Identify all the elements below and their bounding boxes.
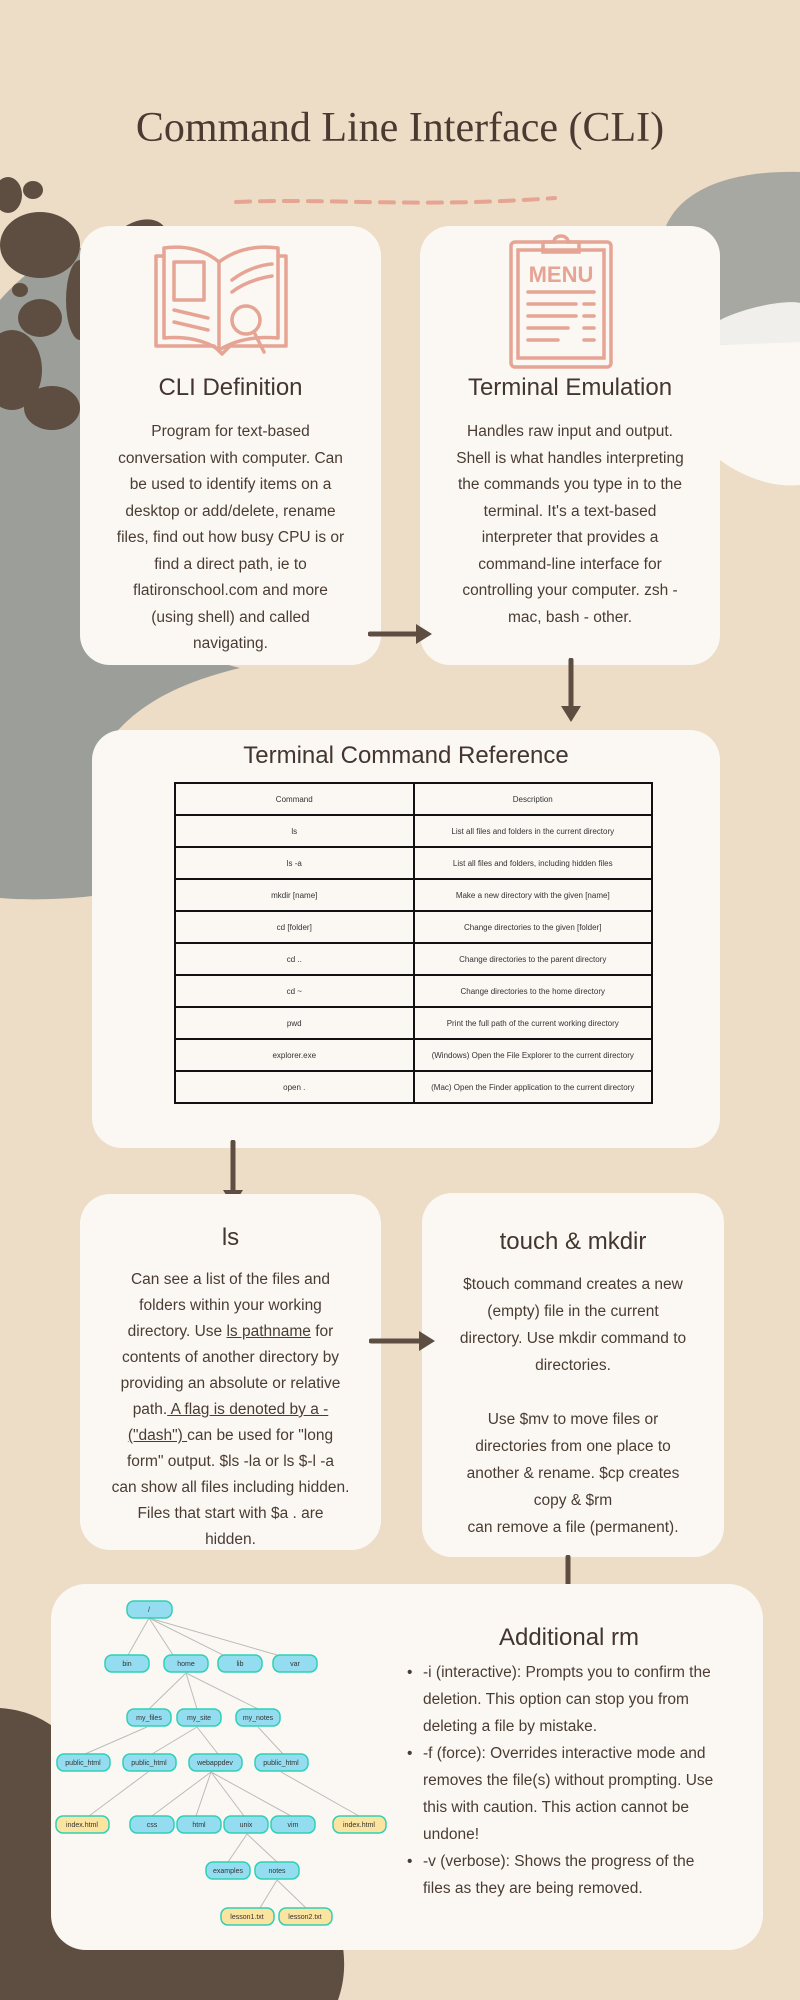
text block: navigating. xyxy=(193,635,268,652)
text block: (using shell) and called xyxy=(151,608,310,626)
chart: directory tree: var xyxy=(290,1661,301,1668)
bullet list: removes the file(s) without prompting. Use xyxy=(423,1772,713,1789)
text block: Handles raw input and output. xyxy=(467,423,673,440)
bullet list: -i (interactive): Prompts you to confirm the xyxy=(423,1664,711,1681)
text block: interpreter that provides a xyxy=(482,529,658,546)
table: ls -a xyxy=(287,858,302,868)
text block: folders within your working xyxy=(139,1297,322,1314)
text block: controlling your computer. zsh - xyxy=(462,582,678,599)
title: Command Line Interface (CLI) xyxy=(136,105,664,151)
table: Print the full path of the current working directory xyxy=(447,1018,619,1028)
arrow: down 3 xyxy=(566,1555,570,1584)
text block: the commands you type in to the xyxy=(458,476,682,493)
chart: directory tree: home xyxy=(177,1661,195,1668)
text block: desktop or add/delete, rename xyxy=(125,502,336,520)
text block xyxy=(112,1271,349,1548)
chart: directory tree: unix xyxy=(240,1822,253,1829)
text block: command-line interface for xyxy=(478,556,662,572)
chart: directory tree: index.html xyxy=(343,1822,375,1829)
heading: touch & mkdir xyxy=(500,1228,646,1255)
table: open . xyxy=(283,1082,305,1092)
chart: directory tree xyxy=(55,1600,387,1926)
bullet list: -f (force): Overrides interactive mode and xyxy=(423,1745,706,1762)
text block: $touch command creates a new xyxy=(463,1276,683,1293)
text block: find a direct path, ie to xyxy=(154,556,307,572)
bullet list: • xyxy=(407,1745,412,1762)
text block xyxy=(116,423,344,652)
heading: Terminal Emulation xyxy=(468,374,672,401)
table: Description xyxy=(513,794,553,804)
text block: providing an absolute or relative xyxy=(121,1375,340,1392)
text block: directories. xyxy=(535,1357,611,1374)
chart: directory tree: css xyxy=(147,1822,158,1829)
bullet list: undone! xyxy=(423,1826,479,1843)
heading: ls xyxy=(222,1224,239,1251)
chart: directory tree: my_notes xyxy=(243,1715,274,1722)
text block: copy & $rm xyxy=(534,1492,612,1509)
table: mkdir [name] xyxy=(271,890,317,900)
chart: directory tree: vim xyxy=(288,1822,299,1829)
icon: menu clipboard: MENU xyxy=(529,262,593,287)
chart: directory tree: html xyxy=(192,1822,206,1829)
chart: directory tree: / xyxy=(148,1607,150,1614)
icon: open book with magnifier xyxy=(154,245,288,356)
panel: additional rm xyxy=(51,1584,763,1950)
text block: Program for text-based xyxy=(151,423,310,440)
text block: Use $mv to move files or xyxy=(488,1411,658,1428)
text block: files, find out how busy CPU is or xyxy=(117,529,344,546)
bullet list xyxy=(407,1664,713,1897)
table: (Windows) Open the File Explorer to the current directory xyxy=(432,1050,634,1060)
text block: can show all files including hidden. xyxy=(112,1479,349,1496)
table: cd ~ xyxy=(287,986,302,996)
table xyxy=(174,782,653,1104)
chart: directory tree: bin xyxy=(122,1661,132,1668)
text block: Files that start with $a . are xyxy=(137,1505,324,1522)
bullet list: • xyxy=(407,1664,412,1681)
chart: directory tree: my_files xyxy=(136,1715,162,1722)
panel: CLI definition xyxy=(80,226,381,665)
panel: terminal emulation xyxy=(420,226,720,665)
text block: Can see a list of the files and xyxy=(131,1271,330,1288)
table: pwd xyxy=(287,1018,302,1028)
arrow: right 2 xyxy=(369,1331,435,1351)
table: (Mac) Open the Finder application to the current directory xyxy=(431,1082,634,1092)
table: Make a new directory with the given [name] xyxy=(456,890,610,900)
chart: directory tree: lesson2.txt xyxy=(288,1914,322,1921)
panel: ls xyxy=(80,1194,381,1550)
bullet list: • xyxy=(407,1853,412,1870)
table: Command xyxy=(276,794,313,804)
text block: Shell is what handles interpreting xyxy=(456,450,684,466)
table: List all files and folders in the current directory xyxy=(451,826,614,836)
text block: (empty) file in the current xyxy=(487,1303,659,1320)
text block xyxy=(460,1276,686,1536)
text block: directory. Use mkdir command to xyxy=(460,1330,686,1347)
text block xyxy=(456,423,684,626)
chart: directory tree: webappdev xyxy=(196,1760,233,1767)
bullet list: files as they are being removed. xyxy=(423,1880,643,1897)
arrow: down 1 xyxy=(561,658,581,722)
table: ls xyxy=(291,826,297,836)
panel: touch & mkdir xyxy=(422,1193,724,1557)
table: explorer.exe xyxy=(272,1050,316,1060)
heading: Additional rm xyxy=(499,1624,639,1651)
icon: menu clipboard xyxy=(509,234,613,369)
table: Change directories to the parent directory xyxy=(459,954,606,964)
bullet list: this with caution. This action cannot be xyxy=(423,1799,689,1816)
table: Change directories to the home directory xyxy=(460,986,605,996)
chart: directory tree: lesson1.txt xyxy=(230,1914,264,1921)
text block: flatironschool.com and more xyxy=(133,582,328,599)
text block: can remove a file (permanent). xyxy=(467,1519,679,1536)
text block: conversation with computer. Can xyxy=(118,450,343,466)
text block: mac, bash - other. xyxy=(508,608,632,626)
chart: directory tree: public_html xyxy=(131,1760,167,1767)
chart: directory tree: notes xyxy=(268,1868,286,1875)
arrow: right 1 xyxy=(368,624,432,644)
chart: directory tree: my_site xyxy=(187,1715,211,1722)
text block: another & rename. $cp creates xyxy=(467,1465,679,1482)
text block: contents of another directory by xyxy=(122,1349,339,1366)
text block: directory. Use ls pathname for xyxy=(128,1323,333,1340)
text block: directories from one place to xyxy=(475,1438,671,1455)
text block: be used to identify items on a xyxy=(130,476,331,493)
chart: directory tree: examples xyxy=(213,1868,243,1875)
panel: command reference table xyxy=(92,730,720,1148)
heading: CLI Definition xyxy=(158,374,303,401)
arrow: down 2 xyxy=(223,1140,243,1194)
text block: terminal. It's a text-based xyxy=(484,502,656,520)
table: Change directories to the given [folder] xyxy=(464,922,601,932)
table: cd [folder] xyxy=(277,922,312,932)
bullet list: deleting a file by mistake. xyxy=(423,1718,597,1735)
bullet list: -v (verbose): Shows the progress of the xyxy=(423,1853,694,1870)
chart: directory tree: lib xyxy=(236,1661,244,1668)
text block: ("dash") can be used for "long xyxy=(128,1427,333,1444)
table: cd .. xyxy=(287,954,302,964)
bullet list: deletion. This option can stop you from xyxy=(423,1691,689,1708)
text block: form" output. $ls -la or ls $-l -a xyxy=(127,1453,334,1470)
chart: directory tree: index.html xyxy=(66,1822,98,1829)
heading: Terminal Command Reference xyxy=(243,742,569,769)
chart: directory tree: public_html xyxy=(65,1760,101,1767)
text block: hidden. xyxy=(205,1531,256,1548)
decorative dashed line xyxy=(236,198,555,203)
text block: path. A flag is denoted by a - xyxy=(133,1401,328,1418)
chart: directory tree: public_html xyxy=(263,1760,299,1767)
table: List all files and folders, including hidden files xyxy=(453,858,613,868)
